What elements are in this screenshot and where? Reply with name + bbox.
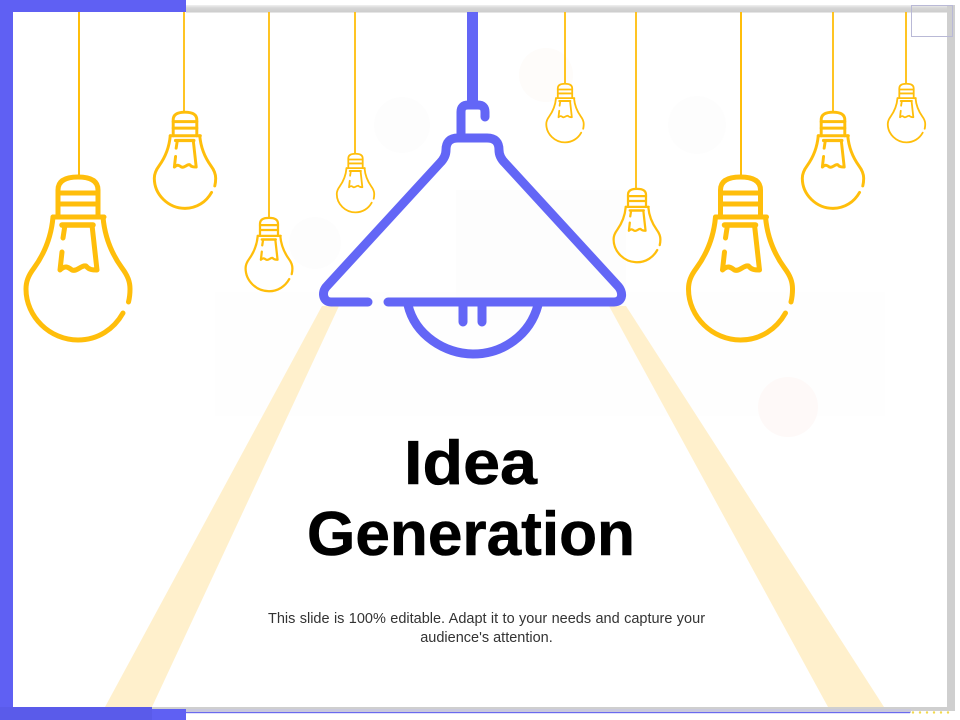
footer dots — [912, 711, 949, 714]
hanging bulb 9 — [888, 12, 925, 142]
faint background watermark — [215, 48, 885, 437]
hanging bulb 2 — [154, 12, 216, 208]
corner outline box — [912, 6, 952, 36]
description text: This slide is 100% editable. Adapt it to your needs and capture your — [268, 611, 705, 627]
hanging bulb 7 — [688, 12, 792, 340]
hanging bulb 5 — [546, 12, 584, 142]
hanging bulb 4 — [337, 12, 374, 212]
title: Idea — [404, 429, 538, 498]
hanging bulb 6 — [614, 12, 660, 262]
hanging bulb 8 — [802, 12, 864, 208]
hanging bulb 1 — [26, 12, 130, 340]
title: Generation — [307, 500, 635, 569]
light beam right — [609, 306, 884, 707]
central lamp — [324, 12, 622, 354]
description text: audience's attention. — [420, 630, 553, 646]
light beam left — [105, 306, 339, 707]
hanging bulb 3 — [246, 12, 292, 291]
